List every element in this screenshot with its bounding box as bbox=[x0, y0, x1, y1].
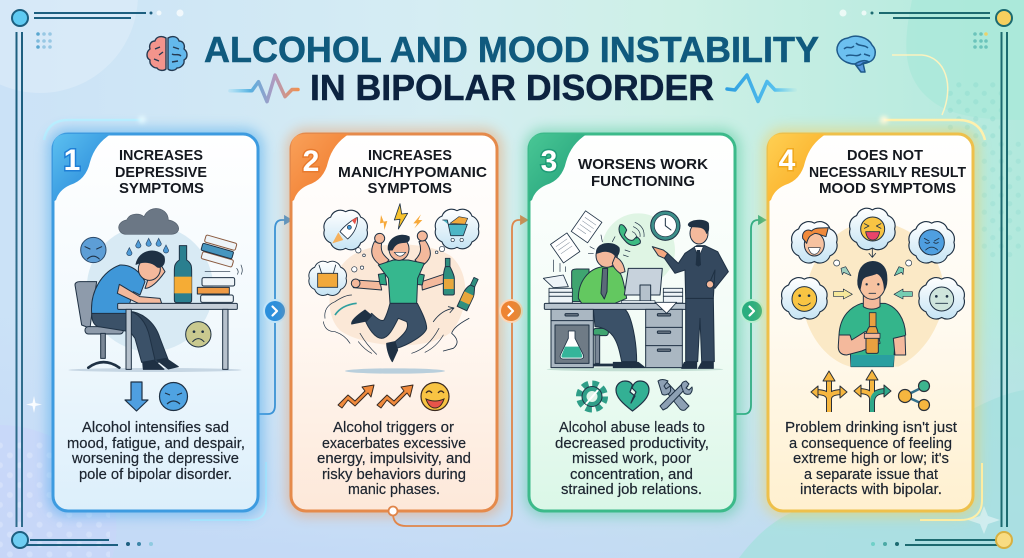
heading 1 bbox=[115, 147, 207, 197]
panel: card 1 bbox=[47, 128, 264, 517]
description 1: pole of bipolar disorder. bbox=[79, 466, 232, 483]
icon: happy face bbox=[421, 382, 449, 410]
icon: pulse left bbox=[230, 75, 298, 102]
description 4: interacts with bipolar. bbox=[800, 481, 942, 498]
heading 2 bbox=[338, 147, 487, 197]
corner frame: left rails and bottom left bbox=[12, 160, 153, 548]
panel: card 2 bbox=[286, 128, 503, 517]
chevron button green bbox=[740, 299, 764, 323]
heading 4: DOES NOT bbox=[847, 147, 923, 164]
description 3 bbox=[555, 419, 709, 498]
icon: share nodes bbox=[898, 380, 930, 410]
description 4 bbox=[785, 419, 958, 498]
title: ALCOHOL AND MOOD INSTABILITY bbox=[204, 29, 819, 70]
heading 1: DEPRESSIVE bbox=[115, 164, 207, 181]
icon: blue brain bbox=[837, 36, 875, 72]
heading 3 bbox=[578, 156, 708, 190]
number badge 1: 1 bbox=[64, 144, 80, 177]
description 3: missed work, poor bbox=[572, 450, 691, 467]
number badge 2 bbox=[291, 134, 349, 202]
heading 2: INCREASES bbox=[368, 147, 452, 164]
number badge 3 bbox=[529, 134, 587, 202]
description 2: energy, impulsivity, and bbox=[317, 450, 471, 467]
connector node bbox=[388, 506, 398, 516]
number badge 3: 3 bbox=[541, 145, 557, 178]
heading 1: SYMPTOMS bbox=[119, 180, 204, 197]
description 4: a consequence of feeling bbox=[789, 435, 952, 452]
corner frame: bottom right bbox=[871, 506, 1012, 548]
heading 4: MOOD SYMPTOMS bbox=[819, 180, 956, 197]
panel: card 3 bbox=[524, 128, 741, 517]
icon: broken heart bbox=[616, 381, 649, 411]
heading 2: MANIC/HYPOMANIC bbox=[338, 164, 487, 181]
heading 1: INCREASES bbox=[119, 147, 203, 164]
title bbox=[204, 29, 819, 108]
illustration: manic jumping man bbox=[309, 204, 481, 374]
description 4: a separate issue that bbox=[804, 466, 939, 483]
corner frame: top right bbox=[840, 10, 1012, 527]
connector: card 3 to card 4 bbox=[735, 216, 765, 414]
glow accents bbox=[44, 55, 985, 520]
illustration: depressed man at desk bbox=[68, 208, 242, 372]
connector: card 1 to card 2 bbox=[258, 216, 291, 414]
number badge 2: 2 bbox=[303, 145, 319, 178]
icon: rising arrows bbox=[338, 385, 413, 408]
description 4: Problem drinking isn't just bbox=[785, 419, 958, 436]
heading 3: FUNCTIONING bbox=[591, 173, 695, 190]
number badge 4 bbox=[768, 134, 826, 202]
icon: sad face bbox=[160, 382, 188, 410]
description 1: Alcohol intensifies sad bbox=[82, 419, 229, 436]
connector: card 2 to card 3 bbox=[393, 216, 527, 526]
description 2: Alcohol triggers or bbox=[333, 419, 454, 436]
chevron button blue bbox=[263, 299, 287, 323]
description 1: mood, fatigue, and despair, bbox=[67, 435, 245, 452]
illustration: stressed worker and boss bbox=[543, 211, 728, 371]
chevron button orange bbox=[499, 299, 523, 323]
icon: pulse right bbox=[727, 75, 795, 102]
illustration: man with bottle and mood bubbles bbox=[782, 208, 964, 367]
icon: wrench and screwdriver bbox=[658, 380, 692, 410]
description 1: worsening the depressive bbox=[71, 450, 239, 467]
icon: down arrow bbox=[125, 382, 148, 411]
description 2: manic phases. bbox=[348, 481, 440, 498]
number badge 4: 4 bbox=[779, 144, 796, 177]
description 3: decreased productivity, bbox=[555, 435, 709, 452]
description 4: extreme high or low; it's bbox=[793, 450, 949, 467]
heading 4 bbox=[809, 147, 966, 197]
icon: broken gear bbox=[580, 384, 604, 409]
number badge 1 bbox=[53, 134, 111, 202]
description 3: Alcohol abuse leads to bbox=[559, 419, 705, 436]
title: IN BIPOLAR DISORDER bbox=[310, 67, 714, 108]
description 1 bbox=[67, 419, 245, 483]
heading 2: SYMPTOMS bbox=[368, 180, 452, 197]
description 2 bbox=[317, 419, 471, 498]
icon: fork arrows green bbox=[854, 370, 891, 412]
description 2: risky behaviors during bbox=[322, 466, 466, 483]
panel: card 4 bbox=[763, 128, 979, 517]
icon: fork arrows orange bbox=[811, 371, 847, 412]
corner frame: top left bbox=[12, 10, 184, 160]
heading 4: NECESSARILY RESULT bbox=[809, 164, 966, 181]
description 3: concentration, and bbox=[570, 466, 693, 483]
icon: two-colour brain bbox=[147, 37, 187, 70]
description 3: strained job relations. bbox=[561, 481, 702, 498]
heading 3: WORSENS WORK bbox=[578, 156, 708, 173]
description 2: exacerbates excessive bbox=[322, 435, 466, 452]
